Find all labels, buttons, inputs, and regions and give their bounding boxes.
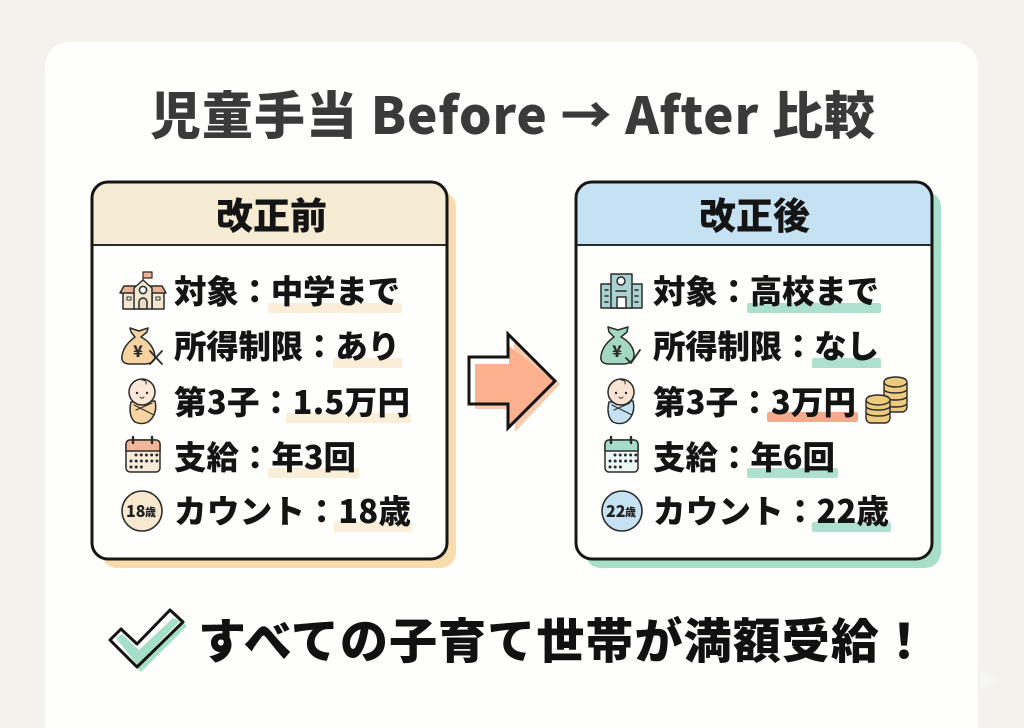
row: count before: カウント：18歳 xyxy=(174,486,411,533)
icon: money bag with check xyxy=(601,327,640,364)
icon: calendar xyxy=(126,437,160,472)
arrow: before to after xyxy=(469,334,560,432)
calendar dots xyxy=(131,455,157,467)
icon: coin stacks xyxy=(866,377,907,423)
panel: after the revision xyxy=(576,182,941,568)
icon: age 22 badge: 22 xyxy=(606,498,626,522)
panel header: before xyxy=(92,182,447,245)
icon: school xyxy=(120,272,166,309)
panel header: before: 改正前 xyxy=(216,186,327,240)
icon: money bag with cross: ¥ xyxy=(133,338,143,362)
row: target before: 対象：中学まで xyxy=(174,266,400,313)
title: 児童手当 Before → After 比較 xyxy=(150,75,875,149)
icon: check mark xyxy=(110,610,187,672)
icon: baby in blue wrap xyxy=(608,379,634,424)
icon: baby in wrap xyxy=(129,379,156,424)
calendar dots xyxy=(610,455,636,467)
row: third child after xyxy=(608,377,907,424)
row: income limit before: 所得制限：あり xyxy=(174,321,400,368)
row: third child before: 第3子：1.5万円 xyxy=(174,377,410,424)
row: target after: 対象：高校まで xyxy=(653,266,879,313)
row: income limit after: 所得制限：なし xyxy=(653,321,879,368)
panel: before the revision xyxy=(92,182,456,568)
icon: high school building xyxy=(601,274,642,308)
row: payment after: 支給：年6回 xyxy=(653,432,835,479)
row: third child after: 第3子：3万円 xyxy=(653,377,856,424)
icon: age 18 badge xyxy=(122,491,162,531)
faint corner mark xyxy=(980,670,997,690)
icon: age 18 badge: 歳 xyxy=(145,504,156,520)
row: payment before: 支給：年3回 xyxy=(174,432,356,479)
closing message: すべての子育て世帯が満額受給！ xyxy=(198,602,928,672)
panel header: after xyxy=(576,182,932,245)
icon: age 22 badge: 歳 xyxy=(625,504,636,520)
panel header: after: 改正後 xyxy=(699,186,810,240)
icon: age 18 badge: 18 xyxy=(126,498,146,522)
row: count after: カウント：22歳 xyxy=(653,486,889,533)
icon: calendar xyxy=(605,437,638,472)
icon: age 22 badge xyxy=(602,491,642,531)
icon: money bag with cross xyxy=(122,328,162,364)
icon: money bag with check: ¥ xyxy=(612,338,622,362)
